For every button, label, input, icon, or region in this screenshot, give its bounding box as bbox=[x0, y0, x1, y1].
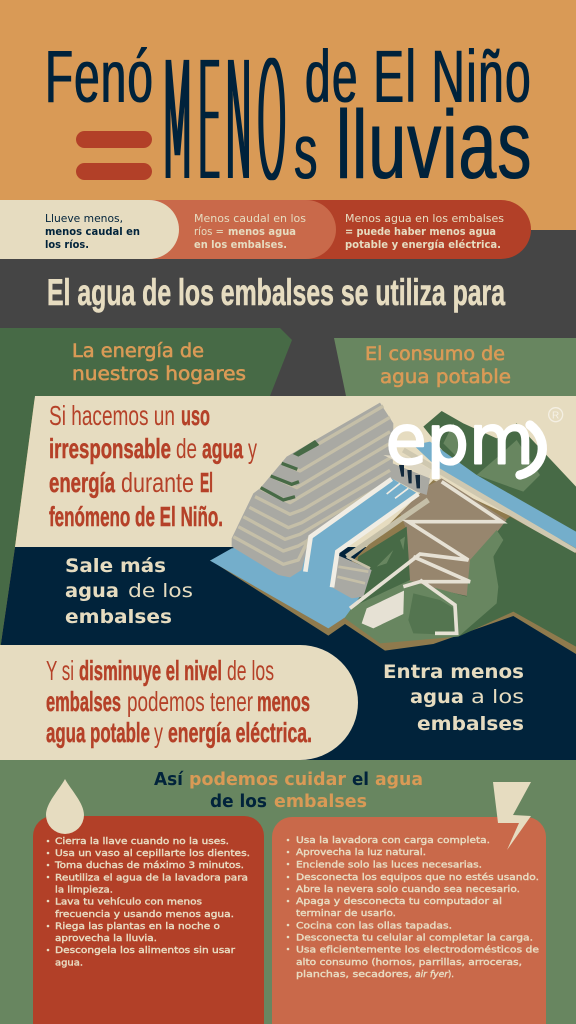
panel: uso irresponsable: durante bbox=[121, 467, 194, 498]
heading: así podemos cuidar: podemos cuidar bbox=[189, 770, 346, 790]
water bbox=[210, 537, 360, 628]
equals sign bbox=[76, 131, 152, 180]
panel: cuidado background bbox=[0, 760, 576, 1024]
pill: menos caudal en los ríos: Menos caudal en los bbox=[194, 213, 306, 225]
list: energía bbox=[287, 835, 539, 980]
list: agua: Cierra la llave cuando no la uses. bbox=[55, 836, 229, 847]
pill: menos agua en los embalses bbox=[300, 200, 531, 259]
list: agua: Usa un vaso al cepillarte los dientes. bbox=[55, 848, 250, 859]
gates bbox=[383, 455, 432, 478]
spillway bbox=[305, 478, 418, 587]
panel: uso irresponsable: y bbox=[248, 433, 257, 464]
heading: así podemos cuidar: el bbox=[352, 770, 369, 790]
panel: uso irresponsable: energía bbox=[49, 467, 115, 498]
heading: así podemos cuidar bbox=[154, 770, 423, 812]
panel: energía tips bbox=[272, 817, 546, 1024]
text: entra menos agua: agua bbox=[410, 686, 464, 708]
list: agua: Lava tu vehículo con menos bbox=[55, 896, 202, 908]
title: de El Niño bbox=[305, 36, 531, 119]
title: Fenó bbox=[45, 36, 153, 119]
panel: uso irresponsable: El bbox=[200, 467, 213, 498]
pill: menos caudal en los ríos: en los embalses. bbox=[194, 239, 287, 251]
pill: llueve menos bbox=[0, 200, 179, 259]
list: agua: agua. bbox=[55, 958, 83, 968]
list: energía: Enciende solo las luces necesarias. bbox=[296, 860, 482, 870]
panel: disminuye el nivel: Y si bbox=[46, 655, 74, 686]
panel: consumo de agua potable: agua potable bbox=[380, 367, 511, 388]
list: energía: Apaga y desconecta tu computador al bbox=[296, 896, 502, 907]
heading: así podemos cuidar: embalses bbox=[274, 792, 367, 812]
list: agua: Reutiliza el agua de la lavadora para bbox=[55, 872, 248, 884]
pill: llueve menos: menos caudal en bbox=[45, 226, 140, 238]
panel: consumo de agua potable: El consumo de bbox=[365, 344, 505, 365]
dam terraces bbox=[232, 403, 393, 577]
panel: agua tips bbox=[33, 816, 264, 1024]
panel: uso irresponsable: agua bbox=[202, 433, 243, 464]
list: energía: Desconecta los equipos que no estés usando. bbox=[296, 872, 539, 883]
pill: llueve menos: Llueve menos, bbox=[45, 213, 123, 225]
panel: disminuye el nivel: y bbox=[154, 717, 163, 748]
pill: menos caudal en los ríos: ríos = bbox=[194, 226, 224, 238]
logo: epm: epm bbox=[386, 401, 534, 480]
reservoir bbox=[413, 442, 576, 548]
text: sale más agua: de los bbox=[128, 580, 193, 602]
panel: consumo de agua potable bbox=[334, 338, 576, 396]
pill: menos agua en los embalses: potable y energía eléctrica. bbox=[345, 239, 501, 251]
pill: menos caudal en los ríos: menos agua bbox=[228, 226, 296, 238]
list: energía: Desconecta tu celular al completar la carga. bbox=[296, 932, 533, 944]
title: s bbox=[294, 108, 317, 195]
panel: uso irresponsable: uso bbox=[181, 400, 210, 431]
list: agua: la limpieza. bbox=[55, 884, 113, 896]
icon: water drop bbox=[46, 779, 84, 834]
text: sale más agua bbox=[65, 555, 193, 628]
panel: energía de los hogares: nuestros hogares bbox=[72, 364, 246, 385]
text: sale más agua: Sale más bbox=[65, 555, 166, 577]
panel: uso irresponsable: Si hacemos un bbox=[49, 400, 175, 431]
list: agua: frecuencia y usando menos agua. bbox=[55, 909, 234, 920]
title bbox=[45, 28, 531, 217]
logo: epm: R bbox=[552, 410, 559, 421]
panel: uso irresponsable: de bbox=[176, 433, 197, 464]
list: energía: air fyer bbox=[415, 969, 449, 980]
list: agua: Riega las plantas en la noche o bbox=[55, 921, 220, 932]
pill: llueve menos: los ríos. bbox=[45, 239, 89, 251]
panel: disminuye el nivel bbox=[0, 645, 358, 760]
list: agua: Toma duchas de máximo 3 minutos. bbox=[54, 860, 244, 871]
list: energía: ). bbox=[448, 969, 454, 980]
title: lluvias bbox=[336, 90, 531, 199]
panel: disminuye el nivel: embalses bbox=[46, 686, 121, 717]
pill: menos agua en los embalses: = puede haber menos agua bbox=[345, 226, 496, 238]
list: energía: Aprovecha la luz natural. bbox=[296, 847, 426, 858]
icon: lightning bolt bbox=[493, 782, 531, 850]
list: energía: Usa eficientemente los electrodomésticos de bbox=[296, 944, 539, 956]
pill: menos caudal en los ríos bbox=[140, 200, 336, 259]
list: energía: Usa la lavadora con carga completa. bbox=[296, 835, 490, 846]
list: energía: terminar de usarlo. bbox=[296, 908, 396, 919]
panel: disminuye el nivel: energía eléctrica. bbox=[168, 717, 312, 748]
list: agua: Descongela los alimentos sin usar bbox=[55, 945, 235, 956]
text: entra menos agua: embalses bbox=[417, 713, 524, 735]
list: energía: Cocina con las ollas tapadas. bbox=[296, 920, 452, 932]
text: entra menos agua: Entra menos bbox=[383, 661, 524, 683]
text: sale más agua: embalses bbox=[65, 606, 172, 628]
heading: así podemos cuidar: Así bbox=[154, 770, 184, 790]
mountains bbox=[423, 411, 576, 533]
panel: uso irresponsable bbox=[15, 396, 576, 547]
panel: disminuye el nivel: podemos tener bbox=[127, 686, 253, 717]
list: agua: aprovecha la lluvia. bbox=[55, 933, 157, 944]
list: energía: alto consumo (hornos, parrillas, arroceras, bbox=[296, 957, 522, 968]
pill: menos agua en los embalses: Menos agua en los embalses bbox=[345, 213, 504, 225]
list: energía: planchas, secadores, bbox=[296, 969, 412, 980]
list: energía: Abre la nevera solo cuando sea necesario. bbox=[296, 884, 520, 895]
panel: navy background bbox=[0, 547, 576, 760]
text: sale más agua: agua bbox=[65, 580, 119, 602]
process pills bbox=[0, 200, 531, 259]
roads bbox=[350, 482, 502, 633]
list: agua bbox=[47, 836, 250, 968]
panel: disminuye el nivel: agua potable bbox=[46, 717, 150, 748]
panel: disminuye el nivel: menos bbox=[257, 686, 310, 717]
panel: uso irresponsable: irresponsable bbox=[49, 433, 171, 464]
illustration: represa bbox=[210, 401, 576, 654]
text: entra menos agua: a los bbox=[471, 686, 524, 708]
text: entra menos agua bbox=[383, 661, 524, 735]
panel: disminuye el nivel: de los bbox=[227, 655, 274, 686]
title: MENO bbox=[161, 28, 287, 217]
panel: uso irresponsable: fenómeno de El Niño. bbox=[49, 501, 223, 532]
heading: así podemos cuidar: agua bbox=[375, 770, 423, 790]
lower slopes bbox=[447, 517, 576, 647]
panel: energía de los hogares bbox=[0, 328, 292, 650]
panel: energía de los hogares: La energía de bbox=[72, 341, 204, 362]
base bbox=[210, 480, 576, 654]
panel: disminuye el nivel: disminuye el nivel bbox=[79, 655, 222, 686]
heading: así podemos cuidar: de los bbox=[210, 792, 267, 812]
